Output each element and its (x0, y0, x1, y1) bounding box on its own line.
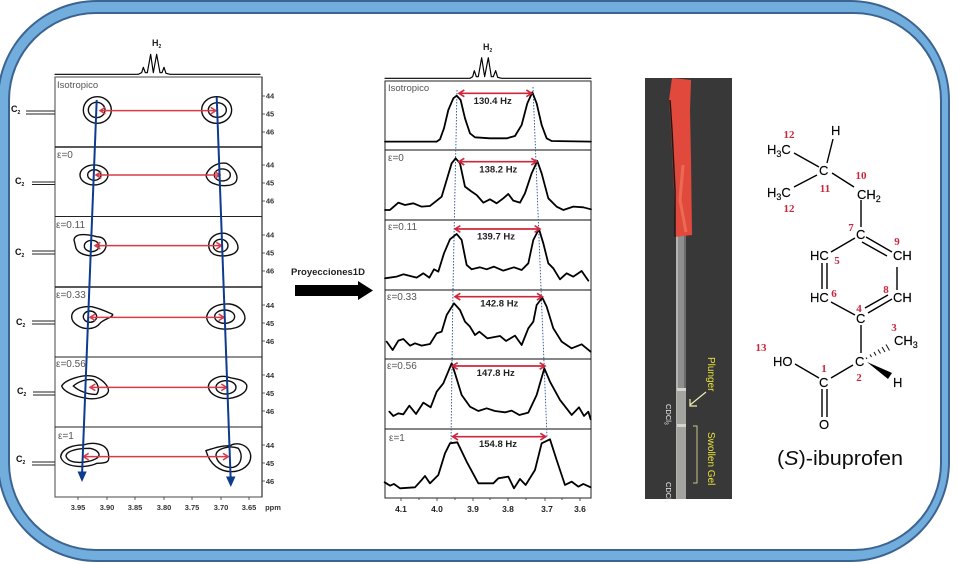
atom labels: C (856, 311, 865, 326)
C2 labels: C (17, 386, 24, 396)
panel: ibuprofen structure (756, 123, 918, 470)
carbon numbers: 4 (856, 303, 862, 315)
bonds (794, 139, 897, 417)
projection row labels (387, 83, 429, 444)
2D panel frames (55, 77, 265, 500)
carbon numbers (756, 129, 900, 384)
atom labels: H (831, 123, 840, 138)
atom labels: C (856, 227, 865, 242)
carbon ppm axis numbers: 44 (266, 301, 275, 310)
C2 labels: C (11, 104, 18, 114)
atom labels: H (767, 185, 776, 200)
carbon numbers: 6 (831, 288, 837, 300)
atom labels: C (819, 163, 828, 178)
coupling values: 147.8 Hz (477, 368, 515, 379)
blue shift arrows (78, 97, 236, 487)
projection row labels: Isotropico (388, 83, 429, 94)
1D trace above projections: 2 (490, 48, 492, 54)
projection axis numbers: 3.6 (574, 504, 586, 514)
red double arrows 1D (452, 90, 546, 440)
red tape (669, 78, 692, 237)
C2 labels: C (16, 317, 22, 327)
carbon ppm axis numbers: 45 (266, 319, 274, 328)
carbon ppm axis numbers: 46 (266, 266, 274, 276)
row labels epsilon 2D (56, 80, 98, 442)
atom labels: CH (893, 248, 912, 263)
arrow: Proyecciones 1D (291, 267, 373, 300)
atom labels: 2 (876, 194, 881, 204)
CDCl3 lower label: CDCl (664, 482, 673, 500)
CDCl3 upper label: CDCl (664, 404, 673, 422)
swollen gel bracket (693, 426, 697, 483)
proton ppm axis: 3.90 (100, 503, 114, 512)
projection frames (385, 81, 591, 501)
1D trace above 2D spectra: 2 (158, 44, 162, 50)
coupling values: 154.8 Hz (479, 439, 517, 450)
atom labels: C (781, 185, 791, 200)
carbon ppm axis numbers: 46 (266, 337, 274, 346)
C2 labels: 2 (22, 460, 26, 466)
projection axis numbers: 4.1 (395, 504, 407, 514)
panel: photo of NMR tube (645, 78, 732, 503)
red double arrows 2D (83, 107, 228, 460)
projection axis numbers: 3.8 (502, 504, 514, 514)
C2 labels: 2 (24, 392, 26, 398)
carbon ppm axis numbers: 45 (266, 389, 274, 398)
C2 labels: C (15, 176, 22, 186)
contours rows 4 to 6 (61, 304, 251, 472)
atom labels: 3 (776, 149, 781, 159)
panel: 1D projections (385, 42, 591, 514)
atom labels: O (819, 417, 829, 432)
projection axis numbers: 4.0 (431, 504, 443, 514)
carbon ppm axis numbers: 46 (266, 477, 274, 486)
C2 labels: 2 (18, 110, 20, 116)
carbon ppm axis numbers: 46 (266, 128, 274, 136)
carbon ppm axis numbers: 44 (266, 230, 275, 240)
atom labels: CH (857, 187, 876, 202)
proton ppm axis: ppm (265, 503, 281, 512)
row labels epsilon 2D: ε=0.11 (56, 220, 85, 231)
atom labels: 3 (776, 192, 781, 202)
carbon ppm axis numbers: 46 (266, 196, 274, 206)
atom labels: CH (894, 333, 913, 348)
carbon ppm axis numbers: 44 (266, 371, 275, 380)
1D trace above 2D spectra: H (152, 38, 158, 48)
swollen gel label: Swollen Gel (705, 432, 716, 485)
proton ppm axis: 3.95 (71, 503, 85, 512)
spectra upper traces (385, 92, 591, 281)
carbon ppm axis numbers: 44 (266, 441, 275, 450)
atom labels: 3 (913, 340, 918, 350)
carbon numbers: 3 (891, 322, 897, 334)
carbon ppm axis numbers: 44 (266, 160, 275, 170)
carbon ppm axis numbers: 45 (266, 178, 274, 188)
carbon ppm axis numbers: 44 (266, 92, 275, 100)
projection axis numbers (395, 504, 586, 514)
atom labels: HC (810, 290, 829, 305)
coupling values: 130.4 Hz (474, 96, 512, 107)
carbon numbers: 2 (856, 372, 862, 384)
C2 labels: 2 (22, 182, 24, 188)
row labels epsilon 2D: Isotropico (57, 80, 98, 91)
projection row labels: ε=0 (388, 153, 404, 164)
glass tube (676, 235, 686, 499)
C2 labels: 2 (22, 323, 26, 329)
atom labels: H (767, 142, 776, 157)
carbon numbers: 11 (820, 183, 830, 195)
panel: 2D NMR spectra (11, 38, 281, 512)
carbon numbers: 7 (848, 222, 854, 234)
coupling values: 142.8 Hz (480, 298, 519, 310)
plunger pointer (690, 392, 706, 406)
carbon ppm axis numbers: 45 (266, 459, 274, 468)
CDCl3 upper label: 3 (662, 422, 668, 425)
1D trace above projections: H (483, 42, 490, 52)
contours rows 1 to 3 (74, 97, 238, 256)
carbon numbers: 8 (883, 284, 889, 296)
projection row labels: ε=0.11 (388, 222, 417, 233)
carbon ppm axis numbers: 45 (266, 110, 274, 118)
carbon numbers: 10 (856, 170, 867, 182)
C2 labels (11, 104, 55, 466)
atom labels: C (855, 354, 864, 369)
proton ppm axis: 3.70 (214, 503, 228, 512)
C2 labels: C (15, 247, 22, 257)
blue dotted guides (451, 87, 547, 443)
atom labels: C (819, 375, 828, 390)
coupling values (474, 96, 519, 450)
C2 labels: C (16, 454, 22, 464)
plunger label: Plunger (705, 357, 716, 392)
atom labels: H (893, 375, 902, 390)
projection row labels: ε=1 (389, 433, 405, 444)
row labels epsilon 2D: ε=0 (57, 150, 73, 161)
row labels epsilon 2D: ε=0.56 (56, 359, 86, 370)
proton ppm axis (71, 503, 281, 512)
carbon ppm axis numbers: 45 (266, 248, 274, 258)
coupling values: 138.2 Hz (479, 164, 518, 176)
proton ppm axis: 3.80 (157, 503, 171, 512)
projection row labels: ε=0.33 (387, 292, 417, 303)
atom labels: HC (810, 248, 829, 263)
atom labels (767, 123, 918, 432)
carbon numbers: 12 (784, 203, 795, 215)
carbon ppm axis numbers (266, 92, 275, 486)
projection axis numbers: 3.7 (541, 504, 553, 514)
row labels epsilon 2D: ε=1 (58, 431, 74, 442)
atom labels: CH (893, 290, 912, 305)
row labels epsilon 2D: ε=0.33 (56, 290, 86, 301)
carbon numbers: 12 (784, 129, 795, 141)
1D trace above 2D spectra (55, 38, 260, 74)
proton ppm axis: 3.85 (128, 503, 142, 512)
C2 labels: 2 (22, 253, 24, 259)
proton ppm axis: 3.75 (185, 503, 199, 512)
arrow: Proyecciones 1D: Proyecciones1D (291, 267, 365, 278)
atom labels: C (781, 142, 791, 157)
spectra lower traces (385, 298, 591, 488)
projection axis numbers: 3.9 (467, 504, 479, 514)
carbon numbers: 9 (894, 236, 900, 248)
coupling values: 139.7 Hz (477, 232, 515, 242)
carbon ppm axis numbers: 46 (266, 407, 274, 416)
carbon numbers: 1 (821, 363, 827, 375)
proton ppm axis: 3.65 (242, 503, 256, 512)
compound name: (S)-ibuprofen (777, 448, 903, 470)
1D trace above projections (385, 42, 591, 78)
carbon numbers: 5 (834, 255, 840, 267)
projection row labels: ε=0.56 (387, 361, 417, 372)
atom labels: HO (773, 354, 792, 369)
CDCl3 lower label: 3 (662, 500, 668, 503)
carbon numbers: 13 (756, 342, 767, 354)
